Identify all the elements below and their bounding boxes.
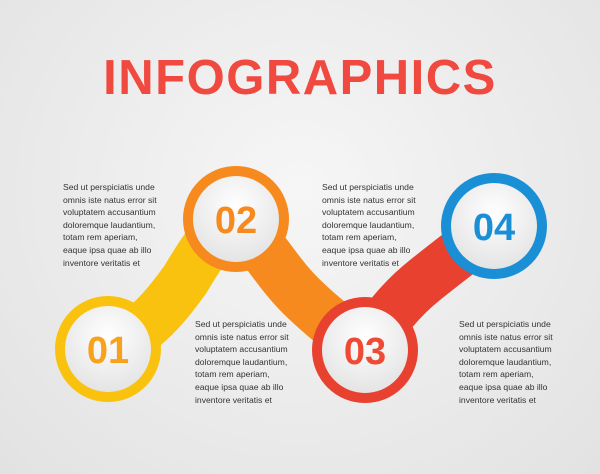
text block 1: eaque ipsa quae ab illo bbox=[63, 245, 151, 255]
text block 1: inventore veritatis et bbox=[63, 258, 140, 268]
connector 2-3 bbox=[236, 219, 365, 350]
node 04 bbox=[441, 173, 547, 279]
connector 3-4 bbox=[365, 226, 494, 350]
node 01: 01 bbox=[87, 330, 129, 372]
text block 2 bbox=[195, 319, 289, 405]
text block 3: doloremque laudantium, bbox=[322, 220, 414, 230]
text block 3: totam rem aperiam, bbox=[322, 232, 397, 242]
text block 4: omnis iste natus error sit bbox=[459, 332, 553, 342]
text block 4: inventore veritatis et bbox=[459, 395, 536, 405]
text block 2: inventore veritatis et bbox=[195, 395, 272, 405]
text block 1: totam rem aperiam, bbox=[63, 232, 138, 242]
text block 4: eaque ipsa quae ab illo bbox=[459, 382, 547, 392]
text block 1: Sed ut perspiciatis unde bbox=[63, 182, 155, 192]
text block 1 bbox=[63, 182, 157, 268]
text block 3: voluptatem accusantium bbox=[322, 207, 415, 217]
text block 3: Sed ut perspiciatis unde bbox=[322, 182, 414, 192]
text block 4 bbox=[459, 319, 553, 405]
connector 1-2 bbox=[108, 219, 236, 349]
node 03 bbox=[312, 297, 418, 403]
text block 1: doloremque laudantium, bbox=[63, 220, 155, 230]
text block 1: omnis iste natus error sit bbox=[63, 195, 157, 205]
node 01 bbox=[55, 296, 161, 402]
text block 2: eaque ipsa quae ab illo bbox=[195, 382, 283, 392]
title: INFOGRAPHICS bbox=[103, 51, 497, 105]
text block 3: inventore veritatis et bbox=[322, 258, 399, 268]
text block 2: voluptatem accusantium bbox=[195, 344, 288, 354]
text block 4: Sed ut perspiciatis unde bbox=[459, 319, 551, 329]
text block 3 bbox=[322, 182, 416, 268]
text block 4: totam rem aperiam, bbox=[459, 369, 534, 379]
text block 3: omnis iste natus error sit bbox=[322, 195, 416, 205]
text block 4: doloremque laudantium, bbox=[459, 357, 551, 367]
text block 2: totam rem aperiam, bbox=[195, 369, 270, 379]
node 04: 04 bbox=[473, 207, 515, 249]
node 03: 03 bbox=[344, 331, 386, 373]
node 02 bbox=[183, 166, 289, 272]
text block 3: eaque ipsa quae ab illo bbox=[322, 245, 410, 255]
node 02: 02 bbox=[215, 200, 257, 242]
text block 1: voluptatem accusantium bbox=[63, 207, 156, 217]
text block 4: voluptatem accusantium bbox=[459, 344, 552, 354]
text block 2: Sed ut perspiciatis unde bbox=[195, 319, 287, 329]
text block 2: omnis iste natus error sit bbox=[195, 332, 289, 342]
text block 2: doloremque laudantium, bbox=[195, 357, 287, 367]
